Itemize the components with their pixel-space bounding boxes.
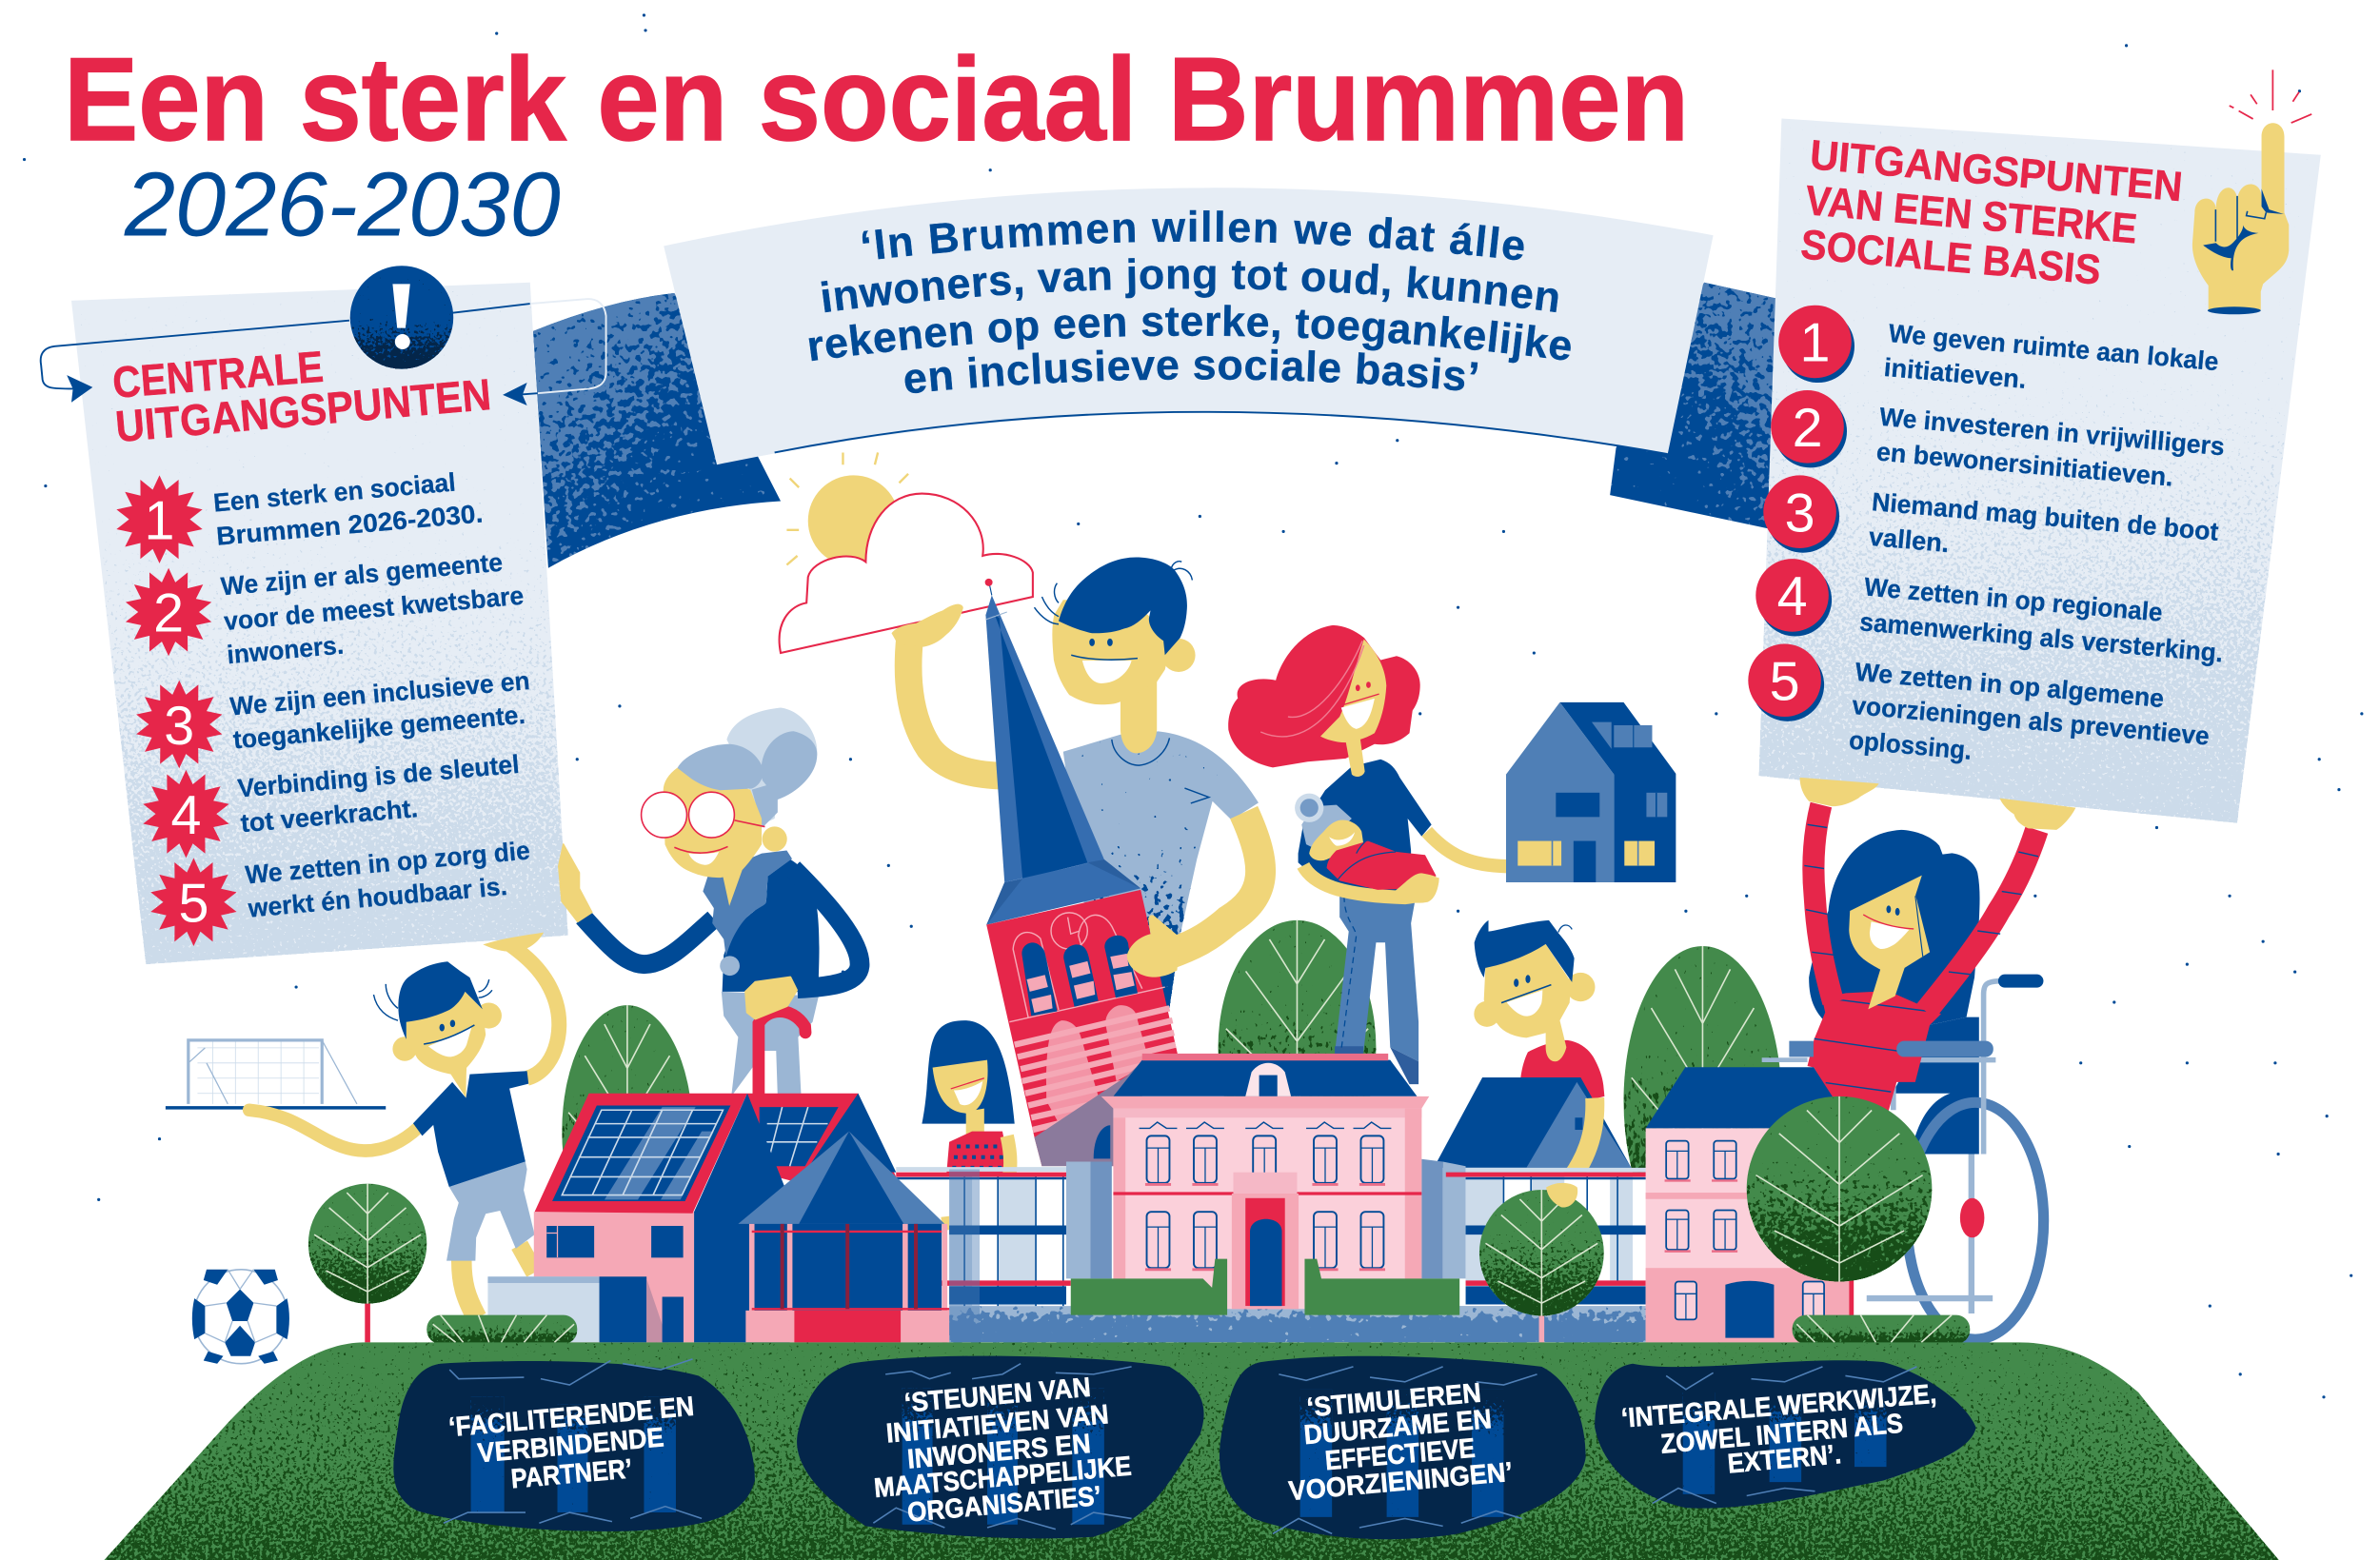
arm left xyxy=(584,918,714,964)
item 2: voor de meest kwetsbare xyxy=(223,581,525,636)
heading xyxy=(1799,131,2185,294)
hand of right boy xyxy=(1546,1183,1577,1208)
blob: steunen initiatieven: INWONERS EN xyxy=(906,1429,1092,1475)
hair xyxy=(1228,625,1420,767)
item 5 xyxy=(150,835,531,946)
legs xyxy=(1335,897,1418,1061)
heading: UITGANGSPUNTEN xyxy=(1808,131,2185,210)
item 2: 2 xyxy=(153,583,184,644)
gable xyxy=(694,1094,790,1342)
wheelchair woman hair xyxy=(1809,830,1980,1025)
item 2: We investeren in vrijwilligers xyxy=(1878,402,2226,461)
hedge right xyxy=(1304,1259,1459,1315)
item 3: toegankelijke gemeente. xyxy=(232,700,526,755)
spire xyxy=(985,595,1104,882)
baby face xyxy=(1309,820,1363,860)
face xyxy=(1052,600,1173,704)
heading: CENTRALE xyxy=(110,342,326,407)
person: boy with goal xyxy=(249,938,559,1318)
item 1 xyxy=(1778,306,2220,394)
item 2: We zijn er als gemeente xyxy=(220,547,504,601)
blob: faciliterende partner: PARTNER’ xyxy=(509,1453,633,1494)
dormer xyxy=(1245,1063,1291,1096)
hand of grandmother at panel xyxy=(559,844,592,921)
windows xyxy=(1147,1135,1383,1268)
shorts xyxy=(446,1161,535,1261)
mouth xyxy=(1870,921,1909,949)
bush right xyxy=(1793,1315,1970,1344)
sills xyxy=(1145,1184,1385,1270)
solar panel xyxy=(552,1105,730,1201)
blob: integrale werkwijze xyxy=(1595,1360,1976,1509)
modern building right xyxy=(1418,1158,1648,1304)
bundle xyxy=(1327,841,1437,890)
wheelchair armrest xyxy=(1789,1041,1993,1056)
right arm of man xyxy=(1161,813,1260,957)
bun xyxy=(726,707,817,824)
blob: integrale werkwijze: ZOWEL INTERN ALS xyxy=(1659,1409,1904,1460)
arm up xyxy=(501,938,559,1078)
roof xyxy=(535,1094,747,1214)
ribbon left xyxy=(533,293,781,568)
modern building left xyxy=(839,1162,1112,1342)
bush left xyxy=(426,1315,577,1344)
blob: stimuleren voorzieningen: ‘STIMULEREN xyxy=(1305,1378,1482,1424)
person: woman in wheelchair xyxy=(1804,805,2038,1111)
person: grandmother xyxy=(584,707,860,1096)
body xyxy=(1299,760,1432,896)
house top right xyxy=(1506,702,1676,882)
item 4: We zetten in op regionale xyxy=(1863,572,2164,627)
icon: sun xyxy=(786,452,908,566)
person: boy right upper body xyxy=(1474,920,1604,1101)
item 2: inwoners. xyxy=(226,630,345,669)
door xyxy=(1232,1194,1299,1309)
pink villa xyxy=(1071,1054,1459,1315)
item 1: 1 xyxy=(145,490,174,551)
item 4 xyxy=(1755,559,2224,667)
neck xyxy=(1121,676,1157,753)
arm to house xyxy=(1427,832,1507,866)
blob: integrale werkwijze: ‘INTEGRALE WERKWIJZE, xyxy=(1620,1379,1937,1434)
left arm xyxy=(908,638,1010,776)
blob: faciliterende partner: ‘FACILITERENDE EN xyxy=(447,1392,695,1443)
blob: steunen initiatieven: INITIATIEVEN VAN xyxy=(885,1399,1110,1450)
item 3 xyxy=(1763,475,2220,558)
item 5 xyxy=(1748,643,2211,765)
item 2: 2 xyxy=(1793,398,1823,459)
item 2 xyxy=(126,547,525,669)
tower body xyxy=(986,890,1178,1166)
arched lower windows xyxy=(1046,1005,1150,1132)
neck xyxy=(1346,738,1365,777)
item 2: en bewonersinitiatieven. xyxy=(1875,437,2174,492)
item 1 xyxy=(116,467,484,563)
callout arrows xyxy=(41,299,606,395)
windows xyxy=(546,1226,594,1257)
icon: football xyxy=(192,1270,289,1364)
ribbon right xyxy=(1610,283,1780,528)
wall xyxy=(1113,1096,1421,1309)
tree front large xyxy=(1747,1096,1932,1324)
item 1: Een sterk en sociaal xyxy=(212,467,457,518)
heading: UITGANGSPUNTEN xyxy=(113,369,493,451)
item 4: samenwerking als versterking. xyxy=(1858,606,2224,667)
mouth xyxy=(428,1027,471,1056)
heading: VAN EEN STERKE xyxy=(1803,177,2139,252)
hedge left xyxy=(1071,1259,1227,1315)
ears xyxy=(392,1037,417,1061)
blob: stimuleren voorzieningen xyxy=(1220,1356,1586,1539)
hill xyxy=(103,1342,2280,1560)
hair xyxy=(678,744,764,790)
icon: rays xyxy=(2230,69,2311,123)
annex xyxy=(487,1276,600,1342)
blob: faciliterende partner xyxy=(393,1359,755,1531)
mouth xyxy=(1082,661,1132,683)
icon: cloud xyxy=(780,494,1033,653)
title: Een sterk en sociaal Brummen xyxy=(64,33,1689,166)
neck xyxy=(723,869,743,906)
item 5: oplossing. xyxy=(1848,725,1973,765)
item 5: 5 xyxy=(178,873,208,934)
torso xyxy=(1808,992,1941,1111)
cane xyxy=(759,1012,805,1095)
face xyxy=(664,767,762,878)
gravel strip xyxy=(949,1306,1648,1342)
house with solar panels xyxy=(487,1094,896,1342)
item 5: voorzieningen als preventieve xyxy=(1851,690,2211,751)
pink townhouse right xyxy=(1646,1067,1853,1342)
arm holding xyxy=(1303,865,1432,898)
blob: steunen initiatieven: ‘STEUNEN VAN xyxy=(903,1372,1092,1419)
blob: steunen initiatieven: MAATSCHAPPELIJKE xyxy=(873,1451,1133,1504)
back trees xyxy=(562,920,1781,1257)
item 3: We zijn een inclusieve en xyxy=(228,665,531,721)
legs xyxy=(462,1253,477,1318)
ears xyxy=(1474,1001,1499,1027)
blob: faciliterende partner: VERBINDENDE xyxy=(476,1422,665,1469)
item 3: vallen. xyxy=(1868,522,1951,558)
item 4: 4 xyxy=(170,785,201,846)
person: tall man xyxy=(892,558,1259,1008)
blob: stimuleren voorzieningen: EFFECTIEVE xyxy=(1324,1433,1477,1476)
jacket xyxy=(723,859,820,992)
item 5: 5 xyxy=(1770,652,1800,713)
wheelchair xyxy=(1762,981,2044,1339)
item 4: tot veerkracht. xyxy=(239,793,419,838)
person: girl in the middle xyxy=(922,1020,1015,1224)
panel: uitgangspunten sterke sociale basis xyxy=(1748,69,2321,823)
roof skirt xyxy=(986,859,1140,925)
subtitle years: 2026-2030 xyxy=(124,153,561,255)
smile xyxy=(688,852,719,865)
glasses xyxy=(642,792,764,838)
hand on cane xyxy=(745,977,797,1018)
hands holding right panel xyxy=(1800,778,2075,830)
item 3: Niemand mag buiten de boot xyxy=(1871,486,2220,546)
item 5: We zetten in op algemene xyxy=(1854,657,2165,713)
heading: SOCIALE BASIS xyxy=(1799,221,2103,294)
face xyxy=(1320,640,1386,742)
item 3 xyxy=(136,665,531,768)
icon: exclamation xyxy=(350,266,453,369)
clock xyxy=(1051,913,1087,949)
item 1: 1 xyxy=(1800,313,1830,374)
quote text: ‘In Brummen willen we dat álle inwoners, van jong tot oud, kunnen rekenen op een sterke, toegankelijke en inclusieve sociale basis’ xyxy=(809,209,1571,394)
goal on tray xyxy=(166,1040,386,1108)
blob: steunen initiatieven: ORGANISATIES’ xyxy=(906,1481,1102,1529)
tower windows xyxy=(1021,936,1138,1016)
tree left xyxy=(308,1184,426,1342)
item 4: 4 xyxy=(1777,566,1808,627)
item 3: 3 xyxy=(164,696,194,757)
lower stripes xyxy=(1015,1008,1179,1130)
item 1: We geven ruimte aan lokale xyxy=(1888,318,2220,376)
pediments xyxy=(1140,1122,1391,1128)
item 1: Brummen 2026-2030. xyxy=(215,498,484,551)
hand of boy at left panel xyxy=(483,933,544,952)
back roof xyxy=(747,1094,896,1184)
ear xyxy=(1161,639,1196,672)
arm right xyxy=(793,869,860,989)
legs xyxy=(722,992,819,1096)
mouth xyxy=(1341,699,1375,729)
arch outlines xyxy=(1013,915,1142,1017)
hand xyxy=(892,604,963,647)
shirt xyxy=(1518,1040,1604,1101)
shirt xyxy=(413,1071,528,1187)
panel: centrale uitgangspunten xyxy=(41,266,606,964)
arm of right boy xyxy=(1561,1097,1595,1191)
blob: stimuleren voorzieningen: DUURZAME EN xyxy=(1302,1404,1493,1451)
head xyxy=(1484,944,1571,1061)
hat xyxy=(1301,805,1352,850)
item 5: We zetten in op zorg die xyxy=(244,835,531,890)
hair xyxy=(1059,558,1187,655)
person: woman with baby xyxy=(1228,625,1507,1084)
pavilion xyxy=(738,1132,949,1342)
item 2 xyxy=(1771,390,2226,492)
item 3: 3 xyxy=(1785,483,1815,543)
church tower xyxy=(985,579,1179,1166)
arms xyxy=(1814,805,1834,1002)
blob: integrale werkwijze: EXTERN’. xyxy=(1726,1439,1842,1480)
icon: pointing hand xyxy=(2192,123,2289,314)
banner with quote xyxy=(664,188,1714,464)
roof xyxy=(1113,1060,1418,1096)
item 4: Verbinding is de sleutel xyxy=(236,749,521,803)
blob: steunen initiatieven xyxy=(797,1356,1204,1538)
house behind right building xyxy=(1434,1077,1631,1168)
item 1: initiatieven. xyxy=(1883,352,2028,394)
hand xyxy=(1395,873,1439,903)
mouth xyxy=(1507,990,1542,1017)
hair xyxy=(398,961,483,1039)
shirt xyxy=(1063,731,1259,1008)
shadow on tower xyxy=(1034,1061,1142,1166)
scarf xyxy=(703,850,792,957)
item 5: werkt én houdbaar is. xyxy=(246,871,508,923)
tree centre right xyxy=(1479,1190,1604,1350)
hair xyxy=(1475,920,1575,982)
head xyxy=(407,992,486,1097)
face xyxy=(1849,876,1930,1009)
wall xyxy=(534,1212,695,1342)
hand on tower xyxy=(1127,915,1180,977)
item 4 xyxy=(143,749,521,858)
arm tray xyxy=(249,1110,419,1151)
blob: stimuleren voorzieningen: VOORZIENINGEN’ xyxy=(1287,1457,1514,1507)
